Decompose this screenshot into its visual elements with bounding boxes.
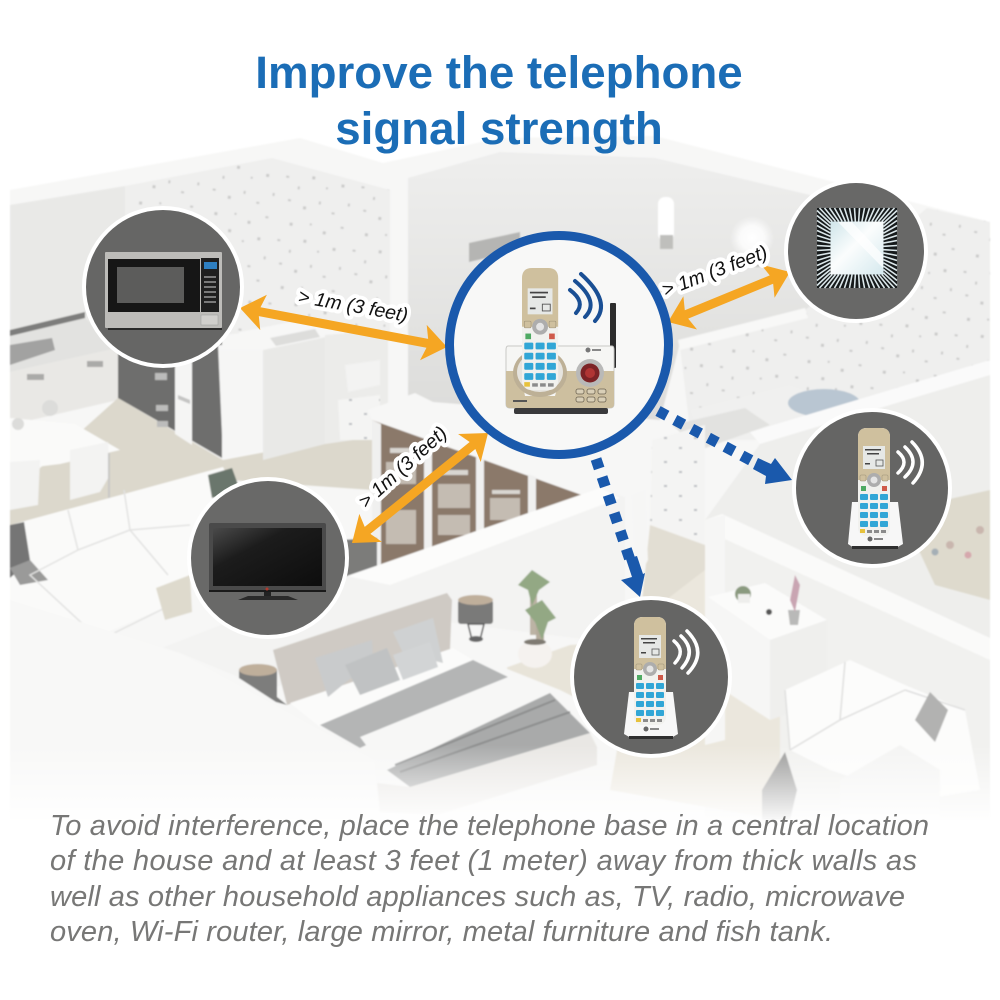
wall between living room and bedroom bbox=[110, 490, 625, 690]
bathtub bbox=[690, 385, 860, 440]
gray pedestal beside the television bbox=[340, 538, 377, 584]
icon: microwave bbox=[105, 252, 222, 330]
toys on the floor bbox=[932, 526, 984, 558]
bathroom ledge bbox=[678, 308, 808, 350]
bathroom sink and wall bbox=[325, 330, 388, 444]
bookshelf bbox=[368, 393, 606, 568]
light floor at the bottom right bbox=[610, 570, 780, 820]
description text: oven, Wi-Fi router, large mirror, metal furniture and fish tank. bbox=[50, 916, 833, 948]
panel: television bbox=[189, 479, 347, 637]
wall tops and base of the scene bbox=[10, 136, 990, 820]
door on the bedroom wall bbox=[632, 490, 648, 582]
arrow: mirror to base bbox=[661, 255, 797, 339]
panel: mirror bbox=[786, 181, 926, 321]
panel: main telephone base bbox=[450, 236, 668, 454]
wall window detail bbox=[469, 232, 520, 262]
icon: television bbox=[209, 523, 326, 600]
description text: well as other household appliances such as, TV, radio, microwave bbox=[50, 881, 905, 913]
arrow: microwave to base bbox=[237, 290, 450, 365]
bed bbox=[273, 593, 597, 815]
bedroom rear floor bbox=[505, 640, 640, 720]
nightstand with lamp bbox=[453, 595, 507, 672]
wall top, right bathroom bbox=[750, 360, 990, 444]
description text bbox=[50, 810, 929, 948]
tiled floor behind bookshelf bbox=[338, 395, 380, 440]
bottom-left wall bbox=[10, 600, 380, 820]
floor patch near the television bbox=[156, 575, 192, 620]
room behind right handset bbox=[705, 375, 990, 640]
second lamp bbox=[239, 664, 287, 705]
living room sofa bbox=[10, 467, 240, 645]
wall sconces bbox=[658, 197, 774, 267]
tiled floor centre bbox=[650, 425, 705, 545]
description text: of the house and at least 3 feet (1 meter) away from thick walls as bbox=[50, 845, 917, 877]
icon: handset in cradle bbox=[848, 428, 922, 549]
title bbox=[255, 47, 743, 154]
icon: signal waves bbox=[570, 274, 601, 321]
dark cabinets bbox=[118, 340, 222, 458]
house floor plan background bbox=[10, 136, 990, 820]
arrow: television to base bbox=[341, 419, 499, 557]
icon: base station bbox=[506, 346, 614, 414]
kitchen counter with stove bbox=[10, 312, 118, 380]
bathroom counter bbox=[672, 408, 770, 450]
beige floor right bbox=[900, 490, 990, 600]
beige kitchen floor bbox=[10, 398, 372, 540]
panel: lower handset bbox=[572, 598, 730, 756]
chair and glass table at the bottom right bbox=[762, 752, 797, 820]
bathroom wall in the centre bbox=[408, 152, 810, 420]
icon: antenna bbox=[610, 303, 616, 368]
dining table and chairs bbox=[10, 400, 120, 510]
tiled bathroom wall right bbox=[680, 208, 990, 440]
white sideboard with decor bbox=[708, 575, 827, 720]
icon: signal waves bbox=[674, 631, 698, 673]
wall of the right-hand living room bbox=[705, 514, 990, 700]
kitchen lower cabinets bbox=[10, 348, 118, 425]
title: signal strength bbox=[335, 103, 663, 154]
title: Improve the telephone bbox=[255, 47, 743, 98]
kitchen island bbox=[218, 320, 360, 460]
distance label: mirror: > 1m (3 feet) bbox=[659, 241, 771, 302]
panel: right handset bbox=[794, 410, 950, 566]
white sofa on the right bbox=[785, 660, 980, 800]
distance label: television: > 1m (3 feet) bbox=[354, 422, 452, 513]
panel: microwave bbox=[84, 208, 242, 366]
dashed arrow to right handset bbox=[658, 411, 792, 484]
description text: To avoid interference, place the telephone base in a central location bbox=[50, 810, 929, 842]
dashed arrow to lower handset bbox=[596, 459, 645, 597]
icon: signal waves bbox=[898, 442, 922, 483]
fade to white below the house bbox=[0, 745, 1000, 825]
tiled wall behind the kitchen bbox=[125, 158, 390, 345]
kitchen back wall bbox=[10, 186, 125, 372]
icon: sunburst mirror bbox=[817, 208, 897, 288]
beige floor centre bbox=[640, 525, 705, 640]
icon: main handset bbox=[522, 268, 558, 390]
plant in a pot bbox=[518, 570, 556, 668]
distance label: microwave: > 1m (3 feet) bbox=[296, 286, 410, 327]
icon: handset in cradle bbox=[624, 617, 698, 739]
